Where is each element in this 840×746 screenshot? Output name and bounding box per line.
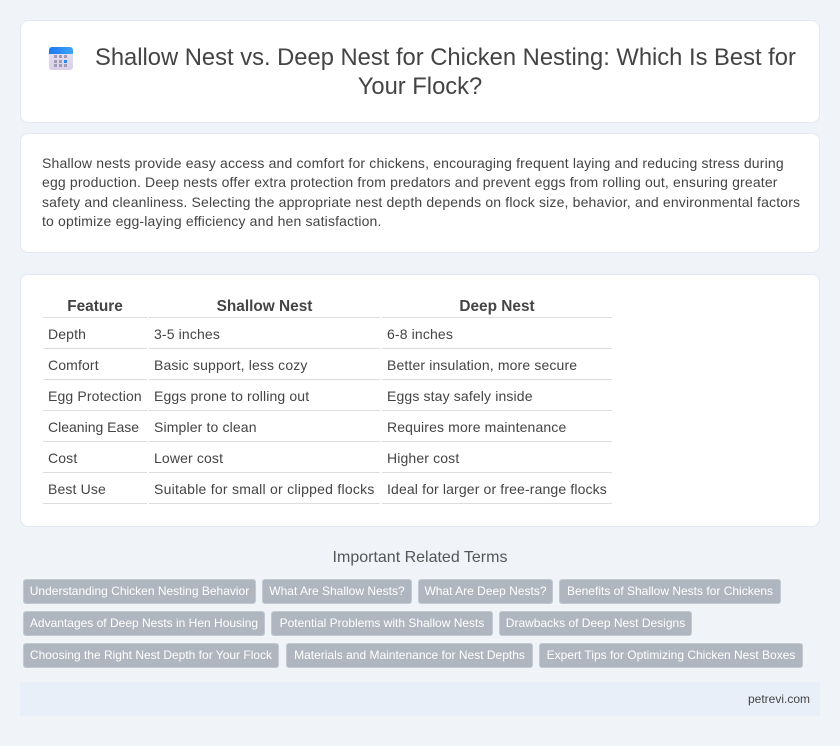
row: egg protection <box>48 388 533 404</box>
tag: Advantages of Deep Nests in Hen Housing <box>30 616 258 630</box>
tag: Potential Problems with Shallow Nests <box>280 616 484 630</box>
tag: Choosing the Right Nest Depth for Your Flock <box>30 648 272 662</box>
tag: Expert Tips for Optimizing Chicken Nest Boxes <box>547 648 795 662</box>
row: cleaning ease: Requires more maintenance <box>387 419 566 435</box>
tag: Materials and Maintenance for Nest Depths <box>294 648 525 662</box>
intro text <box>42 155 800 229</box>
intro text: to optimize egg-laying efficiency and hen satisfaction. <box>42 213 382 229</box>
tag <box>23 611 265 636</box>
panel: comparison table <box>20 274 820 527</box>
row: egg protection: Eggs stay safely inside <box>387 388 533 404</box>
row: depth <box>48 326 453 342</box>
intro text: safety and cleanliness. Selecting the appropriate nest depth depends on flock size, behavior, and environmental factors <box>42 194 800 210</box>
tag <box>23 643 279 668</box>
row: cost <box>48 450 460 466</box>
panel: header card <box>20 20 820 123</box>
title: Your Flock? <box>358 73 482 100</box>
row: comfort: Basic support, less cozy <box>154 357 308 373</box>
row: depth: Depth <box>48 326 86 342</box>
intro text: egg production. Deep nests offer extra protection from predators and prevent eggs from rolling out, ensuring greater <box>42 174 778 190</box>
row: cost: Higher cost <box>387 450 459 466</box>
tag: Understanding Chicken Nesting Behavior <box>30 584 249 598</box>
row: best use <box>48 481 607 497</box>
row: comfort: Comfort <box>48 357 99 373</box>
tag: Benefits of Shallow Nests for Chickens <box>567 584 773 598</box>
tag: Drawbacks of Deep Nest Designs <box>506 616 685 630</box>
row: cost: Cost <box>48 450 77 466</box>
row: best use: Suitable for small or clipped flocks <box>154 481 375 497</box>
column headers: Feature <box>67 298 123 315</box>
footer brand: petrevi.com <box>748 692 810 706</box>
row: egg protection: Egg Protection <box>48 388 142 404</box>
tag: What Are Shallow Nests? <box>269 584 405 598</box>
tag: What Are Deep Nests? <box>424 584 547 598</box>
row: cleaning ease: Cleaning Ease <box>48 419 139 435</box>
row: cleaning ease <box>48 419 566 435</box>
tag <box>418 579 553 604</box>
row: best use: Ideal for larger or free-range flocks <box>387 481 607 497</box>
row: depth: 6-8 inches <box>387 326 453 342</box>
tag <box>499 611 692 636</box>
intro text: Shallow nests provide easy access and comfort for chickens, encouraging frequent laying and reducing stress during <box>42 155 784 171</box>
column headers <box>67 298 535 315</box>
related term tags <box>23 579 803 668</box>
row: egg protection: Eggs prone to rolling out <box>154 388 309 404</box>
row: cleaning ease: Simpler to clean <box>154 419 257 435</box>
comparison table <box>43 298 612 504</box>
tag <box>286 643 533 668</box>
tag <box>23 579 256 604</box>
tag <box>271 611 493 636</box>
row: comfort: Better insulation, more secure <box>387 357 577 373</box>
icon: calendar <box>49 47 73 70</box>
column headers: Shallow Nest <box>217 298 312 315</box>
footer bar <box>20 682 820 716</box>
tag <box>559 579 781 604</box>
heading: related terms: Important Related Terms <box>333 549 507 566</box>
tag <box>539 643 803 668</box>
tag <box>262 579 412 604</box>
panel: intro paragraph <box>20 133 820 253</box>
title: Shallow Nest vs. Deep Nest for Chicken Nesting: Which Is Best for <box>95 44 796 71</box>
row: best use: Best Use <box>48 481 106 497</box>
column headers: Deep Nest <box>459 298 535 315</box>
title <box>95 44 796 100</box>
row: depth: 3-5 inches <box>154 326 220 342</box>
row: cost: Lower cost <box>154 450 223 466</box>
row: comfort <box>48 357 577 373</box>
